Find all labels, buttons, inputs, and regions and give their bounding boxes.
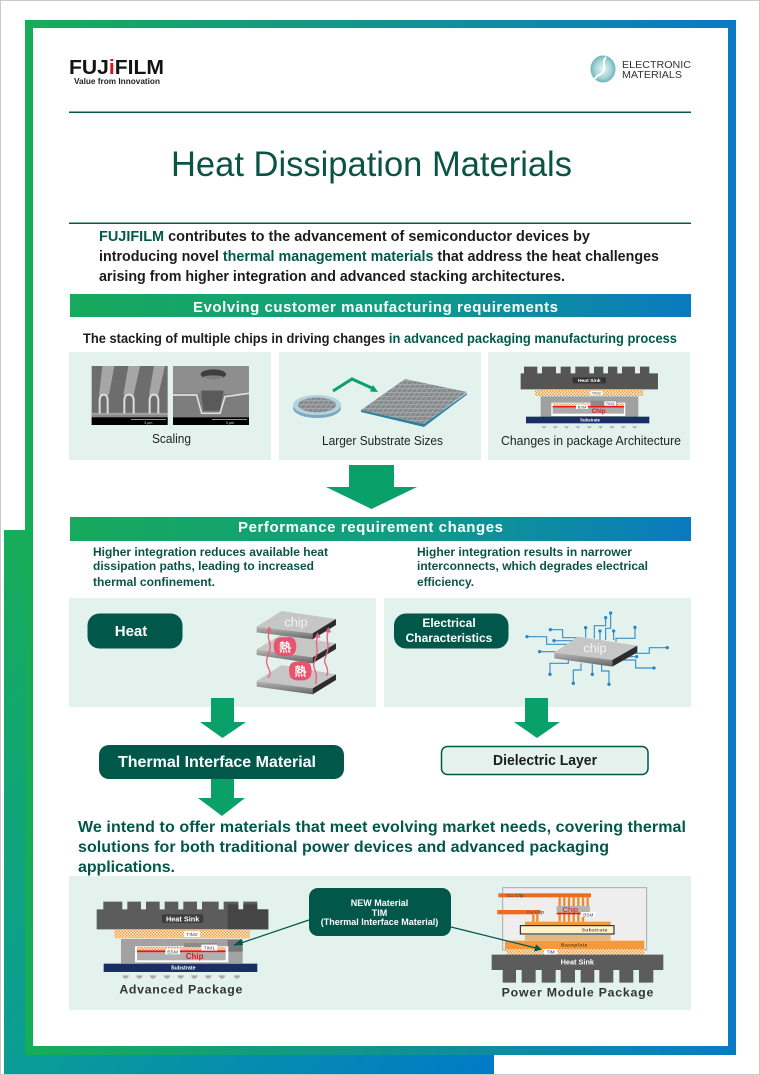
diagram: power module package: Baseplate — [561, 942, 588, 948]
intro text: introducing novel thermal management materials that address the heat challenges — [99, 249, 659, 265]
diagram: power module package: Power Module Package — [502, 986, 653, 1000]
package diagram — [521, 367, 658, 429]
diagram: advanced package: Heat Sink — [166, 914, 200, 923]
section bar: customer requirements: Evolving customer manufacturing requirements — [193, 299, 558, 316]
label: electrical characteristics: Characteristics — [406, 631, 493, 645]
icon: stacked chips with heat: chip — [284, 616, 308, 630]
logo: Electronic Materials: ELECTRONIC — [622, 59, 691, 71]
text block: intent statement: applications. — [78, 859, 175, 876]
text block: electrical requirement: efficiency. — [417, 575, 474, 589]
SEM image: via: 3 μm — [226, 421, 234, 425]
section bar: performance requirement changes — [70, 517, 691, 541]
section bar: performance requirement changes: Performance requirement changes — [238, 519, 503, 536]
diagram: power module package: Cu Clip — [527, 910, 544, 916]
diagram: power module package: Heat Sink — [561, 958, 595, 967]
intro text — [99, 229, 659, 285]
outer lower-left gradient band — [4, 530, 494, 1074]
diagram: power module package: Substrate — [582, 928, 608, 934]
diagram: power module package: BSM — [583, 912, 593, 917]
label: heat — [88, 614, 182, 648]
panel: changes in package architecture — [488, 352, 690, 460]
panel: scaling: Scaling — [152, 431, 191, 446]
text block: intent statement — [78, 819, 686, 876]
diagram: advanced package: Advanced Package — [119, 982, 242, 996]
callout: new material: TIM — [372, 908, 387, 918]
text block: heat requirement: Higher integration reduces available heat — [93, 545, 328, 559]
arrow: large down arrow — [326, 465, 417, 509]
label: heat: Heat — [115, 623, 147, 640]
callout: new material — [309, 888, 451, 936]
text block: heat requirement: thermal confinement. — [93, 575, 215, 589]
panel: heat — [69, 598, 376, 707]
package diagram: Substrate — [580, 418, 601, 423]
SEM image: trenches: 3 μm — [144, 421, 152, 425]
intro text: FUJIFILM contributes to the advancement of semiconductor devices by — [99, 229, 590, 245]
package diagram: Chip — [592, 408, 606, 415]
icon: stacked chips with heat: 熱 — [279, 640, 291, 655]
logo: Fujifilm: Value from Innovation — [74, 77, 160, 86]
text block: intent statement: We intend to offer materials that meet evolving market needs, covering thermal — [78, 819, 686, 836]
text block: heat requirement — [93, 545, 328, 589]
box: dielectric layer: Dielectric Layer — [493, 752, 597, 769]
text block: intent statement: solutions for both traditional power devices and advanced packaging — [78, 839, 609, 856]
icon: chip with circuit traces: chip — [583, 641, 607, 655]
package diagram: Heat Sink — [578, 378, 601, 384]
panel: scaling — [69, 352, 271, 460]
diagram: advanced package: TIM1 — [204, 945, 215, 951]
arrow: heat to thermal interface material — [200, 698, 246, 738]
subheading: stacking: The stacking of multiple chips in driving changes in advanced packaging manufacturing process — [83, 330, 677, 346]
package diagram: TIM1 — [606, 401, 616, 406]
substrate panel — [361, 379, 467, 427]
icon: stacked chips with heat: 熱 — [294, 664, 306, 679]
arrow: electrical to dielectric layer — [514, 698, 560, 738]
panel: package comparison — [69, 876, 691, 1010]
package diagram: BSM — [578, 404, 586, 409]
text block: heat requirement: dissipation paths, leading to increased — [93, 559, 314, 573]
diagram: power module package: Chip — [562, 905, 578, 914]
arrow: thermal material to offer — [198, 779, 245, 816]
arrow: callout to power module — [451, 927, 542, 952]
panel: electrical characteristics — [384, 598, 691, 707]
box: dielectric layer — [442, 746, 648, 774]
diagram: advanced package: Chip — [186, 952, 204, 961]
section bar: customer requirements — [70, 294, 691, 317]
logo: Electronic Materials — [590, 56, 691, 82]
SEM image: trenches — [92, 366, 168, 425]
label: electrical characteristics — [394, 614, 508, 648]
text block: electrical requirement: Higher integration results in narrower — [417, 545, 632, 559]
diagram: advanced package: Substrate — [171, 966, 196, 972]
callout: new material: (Thermal Interface Material) — [321, 917, 438, 927]
icon: chip with circuit traces — [525, 611, 669, 686]
title: Heat Dissipation Materials — [171, 145, 572, 184]
diagram: advanced package: TIM2 — [186, 932, 198, 938]
SEM image: via — [173, 366, 249, 425]
panel: changes in package architecture: Changes in package Architecture — [501, 433, 681, 448]
panel: larger substrate sizes: Larger Substrate Sizes — [322, 433, 443, 448]
logo: Fujifilm: FUJiFILM — [69, 57, 164, 79]
diagram: advanced package — [97, 902, 268, 996]
arrow: wafer to panel — [333, 379, 378, 392]
callout: new material: NEW Material — [351, 898, 408, 908]
text block: electrical requirement: interconnects, which degrades electrical — [417, 559, 648, 573]
logo: Electronic Materials: MATERIALS — [622, 69, 682, 81]
arrow: callout to advanced package — [233, 920, 309, 946]
diagram: power module package: Cu Clip — [507, 893, 524, 899]
icon: stacked chips with heat — [257, 611, 336, 694]
label: electrical characteristics: Electrical — [422, 616, 476, 630]
box: thermal interface material — [99, 745, 344, 779]
package diagram: TIM2 — [592, 391, 602, 396]
box: thermal interface material: Thermal Interface Material — [118, 754, 316, 771]
diagram: power module package: TIM — [547, 950, 555, 955]
intro text: arising from higher integration and advanced stacking architectures. — [99, 269, 565, 285]
wafer — [293, 395, 341, 418]
panel: larger substrate sizes — [279, 352, 481, 460]
diagram: advanced package: BSM — [167, 949, 178, 955]
text block: electrical requirement — [417, 545, 648, 589]
diagram: power module package — [492, 888, 663, 1000]
